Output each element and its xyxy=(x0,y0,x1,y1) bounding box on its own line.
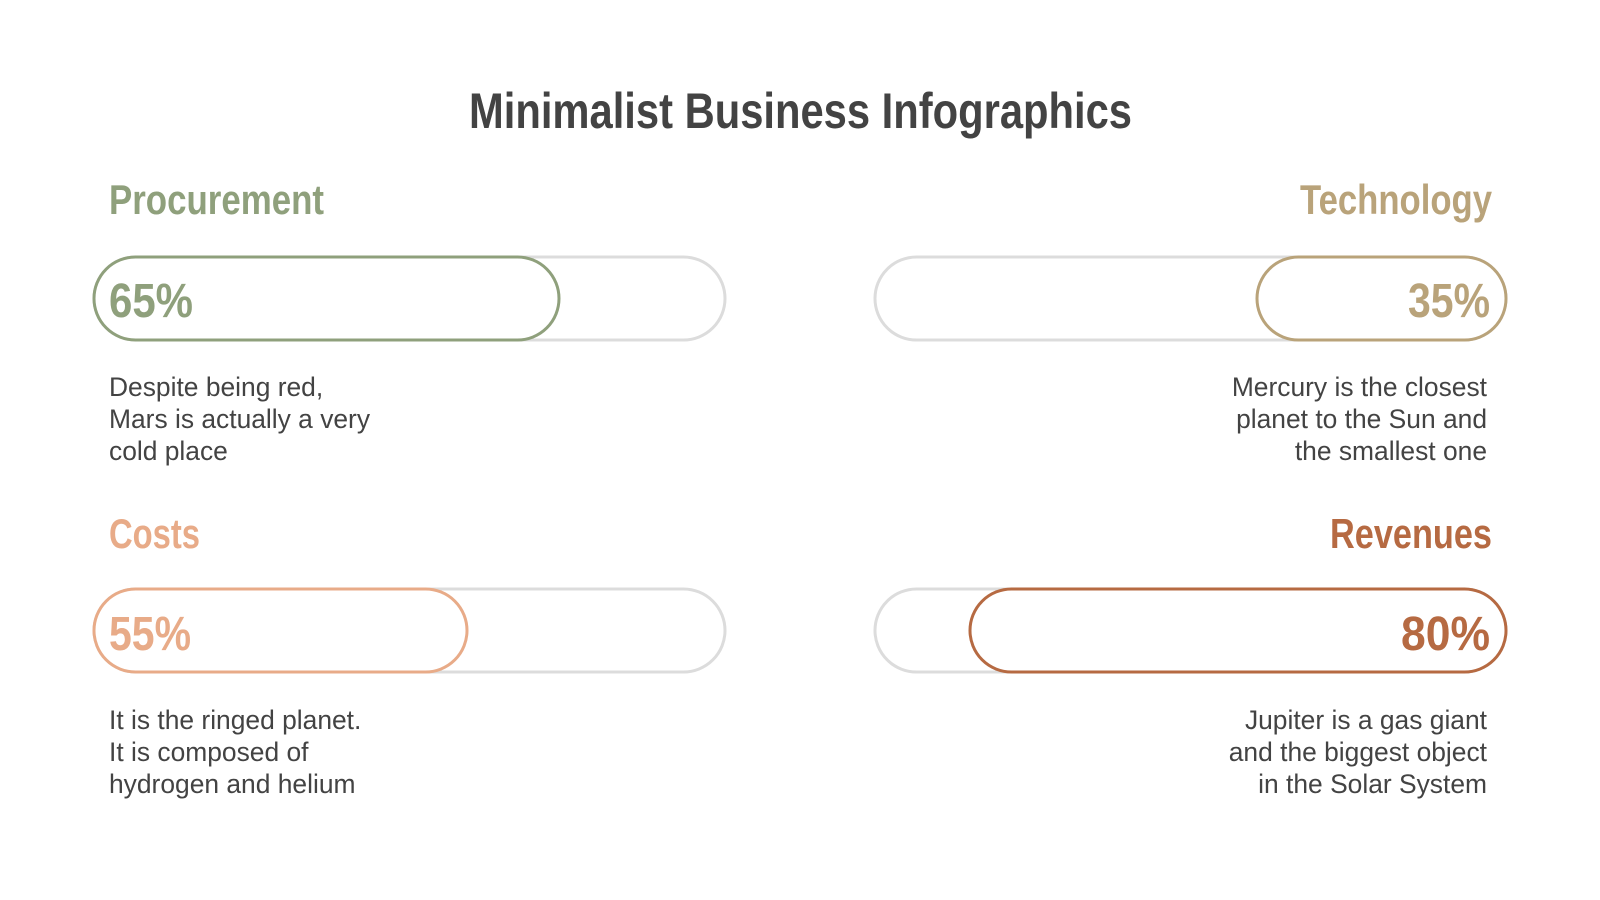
text: revenues description: and the biggest object xyxy=(1229,737,1488,767)
panel: revenues xyxy=(875,510,1506,799)
bar: technology track xyxy=(875,257,1506,340)
text: costs description: It is composed of xyxy=(109,737,309,767)
value: 35%: 35% xyxy=(1408,275,1490,328)
value: 55%: 55% xyxy=(109,608,191,661)
text: revenues description: Jupiter is a gas giant xyxy=(1245,705,1488,735)
text: procurement description: cold place xyxy=(109,436,228,466)
panel: procurement xyxy=(94,176,725,466)
heading: technology: Technology xyxy=(1300,176,1493,223)
heading: procurement: Procurement xyxy=(109,176,324,223)
text: technology description: the smallest one xyxy=(1295,436,1487,466)
text: procurement description: Mars is actually a very xyxy=(109,404,371,434)
bar: procurement 65% xyxy=(94,257,559,340)
bar: costs track xyxy=(94,589,725,672)
text: technology description: planet to the Sun and xyxy=(1236,404,1487,434)
bar: revenues track xyxy=(875,589,1506,672)
text: costs description: hydrogen and helium xyxy=(109,769,356,799)
heading: costs: Costs xyxy=(109,510,200,557)
text: procurement description: Despite being red, xyxy=(109,372,323,402)
value: 65%: 65% xyxy=(109,275,193,328)
panel: costs xyxy=(94,510,725,799)
bar: technology 35% xyxy=(1257,257,1506,340)
title: Minimalist Business Infographics xyxy=(469,83,1132,139)
bar: revenues 80% xyxy=(970,589,1506,672)
value: 80%: 80% xyxy=(1401,608,1490,661)
text: costs description: It is the ringed planet. xyxy=(109,705,361,735)
bar: procurement track xyxy=(94,257,725,340)
text: revenues description: in the Solar System xyxy=(1258,769,1487,799)
heading: revenues: Revenues xyxy=(1330,510,1492,557)
text: technology description: Mercury is the closest xyxy=(1232,372,1488,402)
bar: costs 55% xyxy=(94,589,467,672)
panel: technology xyxy=(875,176,1506,466)
